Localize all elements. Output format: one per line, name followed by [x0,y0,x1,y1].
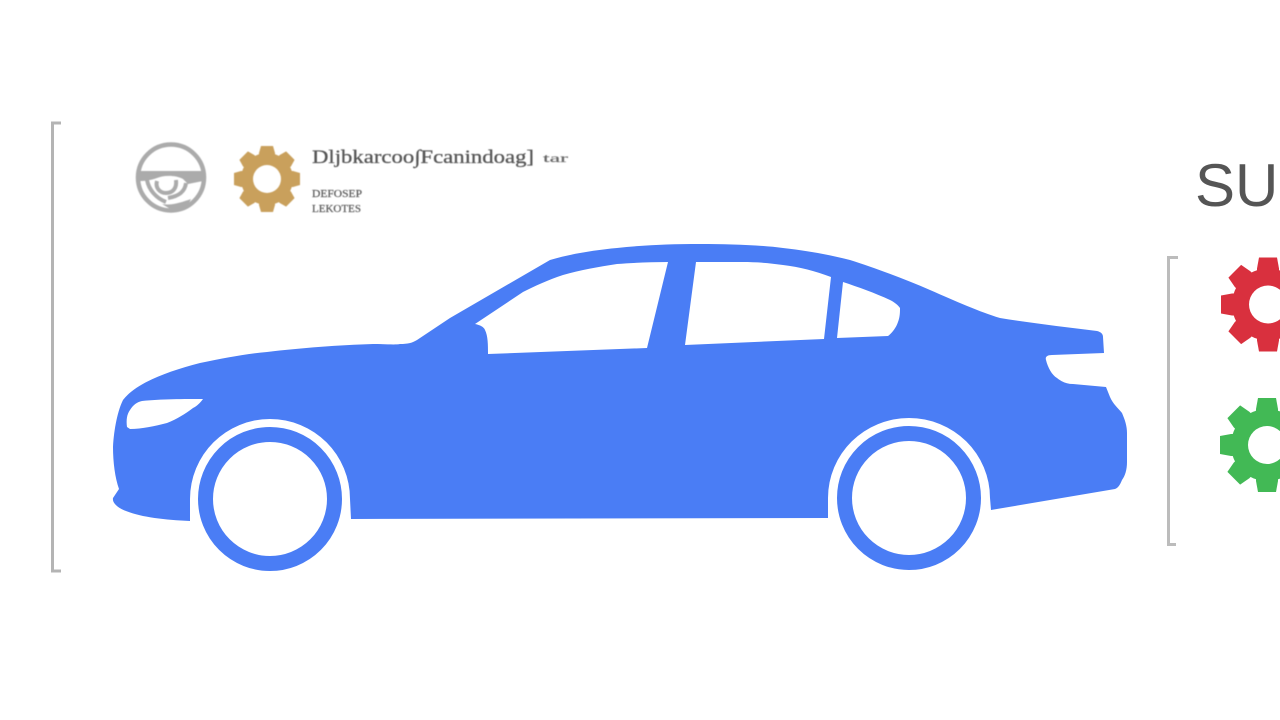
icon: green gear [1220,398,1280,492]
title fragment: SU [1195,152,1278,219]
icon: gold gear [234,146,300,212]
icon: red gear [1221,258,1280,352]
car: front window [475,262,668,354]
sub text line 2: LEKOTES [312,204,361,215]
car: front wheel [206,434,334,564]
car: rear quarter window [837,282,900,338]
heading suffix: tar [543,151,568,165]
right bracket [1168,258,1178,544]
car: middle window [685,262,831,345]
heading text: Dljbkarcoo∫Fcanindoag] [312,147,534,169]
car silhouette [113,244,1127,564]
icon: steering wheel [138,144,204,210]
sub text line 1: DEFOSEP [312,189,362,200]
car: rear wheel [844,434,974,562]
car: headlight [127,399,203,429]
left bracket [52,123,61,571]
